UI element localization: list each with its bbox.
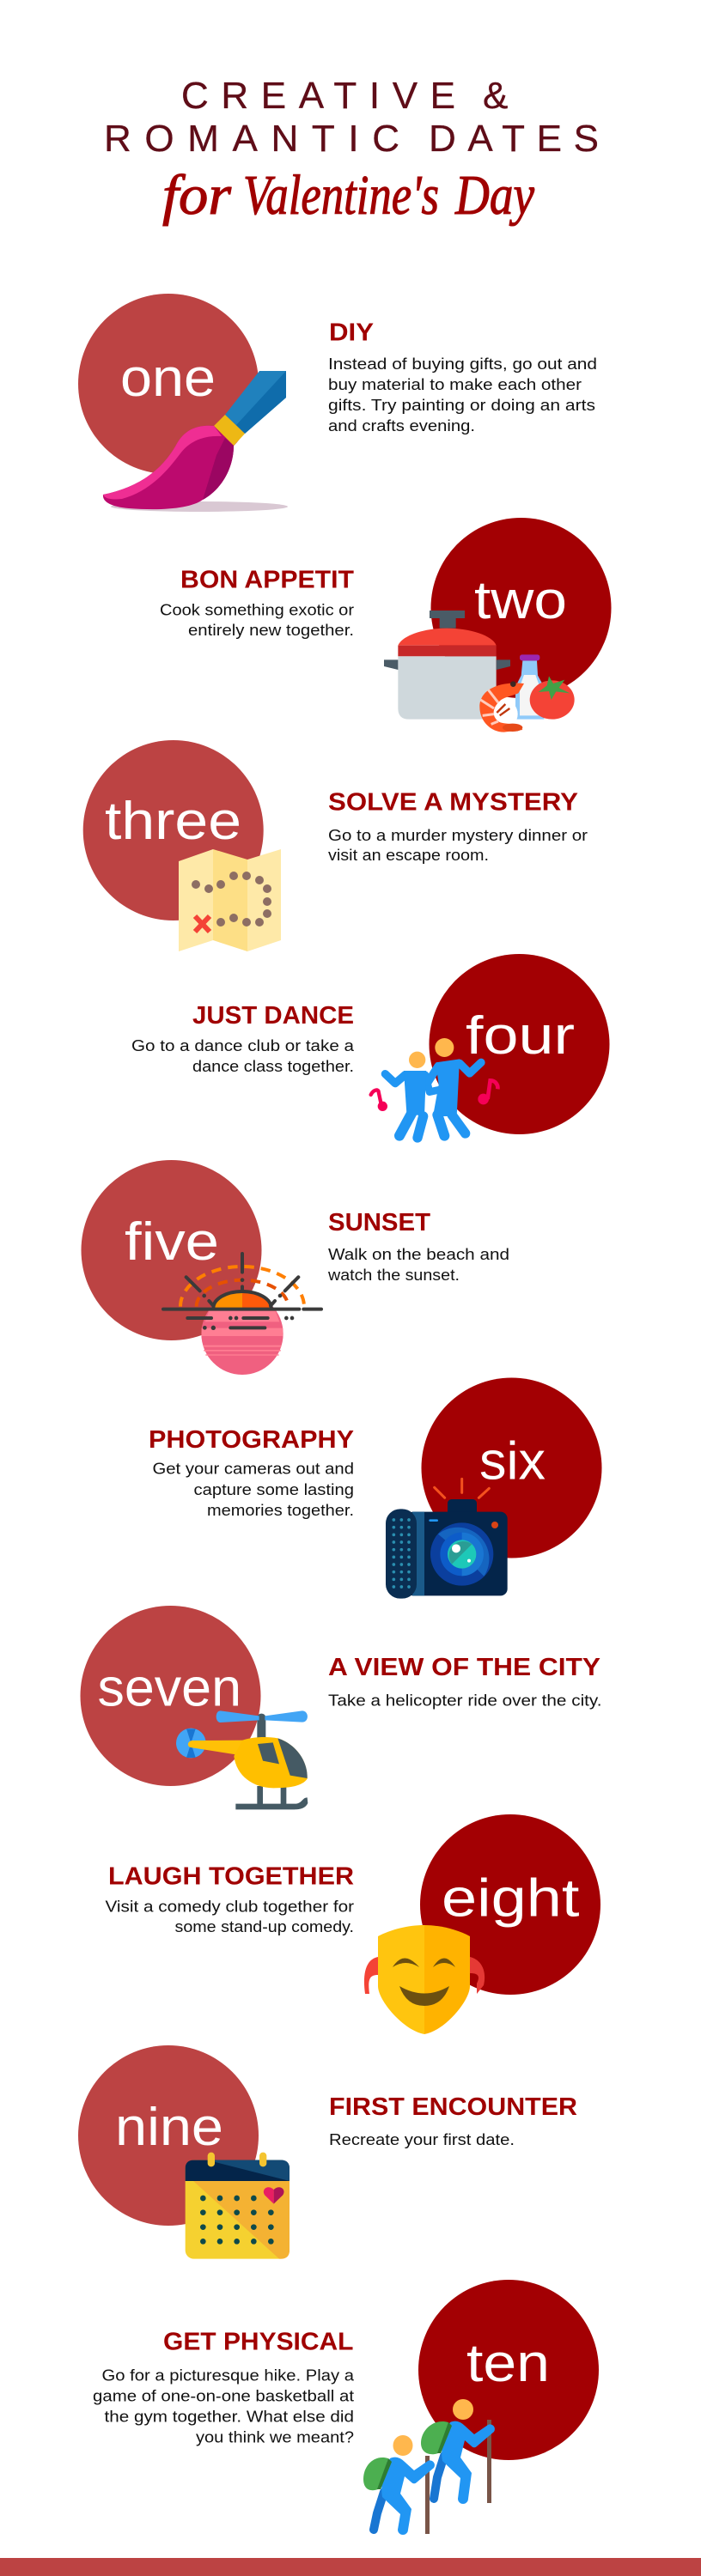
icon: two hikers with backpacks: [363, 2399, 495, 2535]
number circle five: [81, 1160, 261, 1340]
icon: helicopter: [176, 1710, 308, 1809]
description: and crafts evening.: [328, 416, 475, 434]
description: entirely new together.: [188, 621, 354, 639]
description: Instead of buying gifts, go out and: [328, 355, 597, 373]
number circle eight: [420, 1814, 600, 1995]
number circle four: [430, 954, 610, 1134]
icon: paintbrush: [103, 371, 288, 512]
description: [328, 826, 588, 864]
description: [93, 2366, 355, 2445]
panel: three Solve a Mystery: [83, 740, 588, 951]
description: Go to a dance club or take a: [131, 1036, 355, 1054]
heading: DIY: [329, 319, 374, 347]
heading: FIRST ENCOUNTER: [329, 2093, 577, 2121]
heading: BON APPETIT: [180, 567, 354, 594]
heading: SOLVE A MYSTERY: [328, 788, 578, 816]
number circle three: three: [105, 792, 241, 851]
description: Visit a comedy club together for: [105, 1898, 354, 1915]
panel: two Bon Appetit: [160, 518, 612, 732]
description: game of one-on-one basketball at: [93, 2387, 354, 2404]
title: [104, 75, 599, 227]
panel: one DIY: [78, 294, 597, 512]
description: you think we meant?: [196, 2428, 354, 2445]
icon: sunset over water: [163, 1254, 321, 1375]
description: [328, 355, 597, 434]
description: Recreate your first date.: [329, 2130, 515, 2148]
description: memories together.: [207, 1501, 354, 1519]
heading: LAUGH TOGETHER: [108, 1863, 354, 1891]
heading: SUNSET: [328, 1209, 430, 1236]
heading: JUST DANCE: [192, 1002, 354, 1030]
number circle seven: [81, 1606, 261, 1786]
heading: PHOTOGRAPHY: [149, 1426, 354, 1454]
description: [105, 1898, 354, 1935]
description: Take a helicopter ride over the city.: [328, 1692, 601, 1709]
script subtitle: Valentine's: [243, 164, 439, 227]
number circle eight: eight: [442, 1868, 579, 1929]
number circle ten: ten: [466, 2334, 550, 2393]
number circle five: five: [125, 1212, 219, 1272]
script subtitle: Day: [454, 164, 535, 227]
icon: camera: [386, 1479, 508, 1599]
panel: ten Get Physical: [93, 2280, 599, 2535]
description: the gym together. What else did: [105, 2408, 354, 2425]
description: Cook something exotic or: [160, 601, 354, 618]
icon: pot, shrimp, bottle and tomato: [384, 611, 575, 732]
description: visit an escape room.: [328, 846, 489, 864]
number circle two: [431, 518, 612, 698]
description: [153, 1460, 354, 1519]
title line 1: CREATIVE: [181, 75, 455, 117]
panel: four Just Dance: [131, 954, 610, 1138]
number circle seven: seven: [98, 1659, 241, 1717]
number circle six: [421, 1377, 601, 1558]
title line 2: ROMANTIC: [104, 118, 399, 160]
description: buy material to make each other: [328, 375, 582, 393]
number circle one: one: [120, 349, 216, 408]
number circle two: two: [474, 571, 567, 630]
number circle six: six: [479, 1432, 546, 1491]
icon: comedy mask: [364, 1925, 485, 2034]
number circle one: [78, 294, 259, 474]
number circle four: four: [466, 1006, 575, 1066]
number circle nine: nine: [115, 2098, 223, 2157]
panel: five Sunset: [81, 1160, 509, 1375]
title line 2: [104, 118, 599, 160]
panel: eight Laugh Together: [105, 1814, 600, 2034]
footer bar: [0, 2558, 701, 2576]
panel: seven A View of the City: [81, 1606, 601, 1809]
description: Walk on the beach and: [328, 1245, 509, 1263]
heading: A VIEW OF THE CITY: [328, 1654, 600, 1681]
description: [160, 601, 354, 639]
description: dance class together.: [192, 1057, 354, 1075]
number circle nine: [78, 2045, 259, 2226]
title line 2: DATES: [429, 118, 599, 160]
script subtitle: for: [162, 164, 231, 227]
description: Get your cameras out and: [153, 1460, 354, 1477]
description: gifts. Try painting or doing an arts: [328, 396, 595, 414]
description: Go to a murder mystery dinner or: [328, 826, 588, 844]
script subtitle: [162, 164, 535, 227]
icon: dancing couple with music notes: [371, 1038, 497, 1138]
description: capture some lasting: [194, 1480, 354, 1498]
panel: six Photography: [149, 1377, 601, 1599]
description: watch the sunset.: [327, 1266, 460, 1284]
description: [327, 1245, 509, 1284]
description: some stand-up comedy.: [175, 1917, 354, 1935]
panel: nine First Encounter: [78, 2045, 577, 2259]
icon: treasure map: [179, 849, 281, 951]
description: [131, 1036, 355, 1075]
number circle three: [83, 740, 264, 920]
number circle ten: [418, 2280, 599, 2460]
icon: calendar with heart: [186, 2153, 290, 2259]
description: Go for a picturesque hike. Play a: [101, 2366, 355, 2384]
heading: GET PHYSICAL: [163, 2329, 354, 2356]
title line 1: &: [483, 75, 508, 117]
